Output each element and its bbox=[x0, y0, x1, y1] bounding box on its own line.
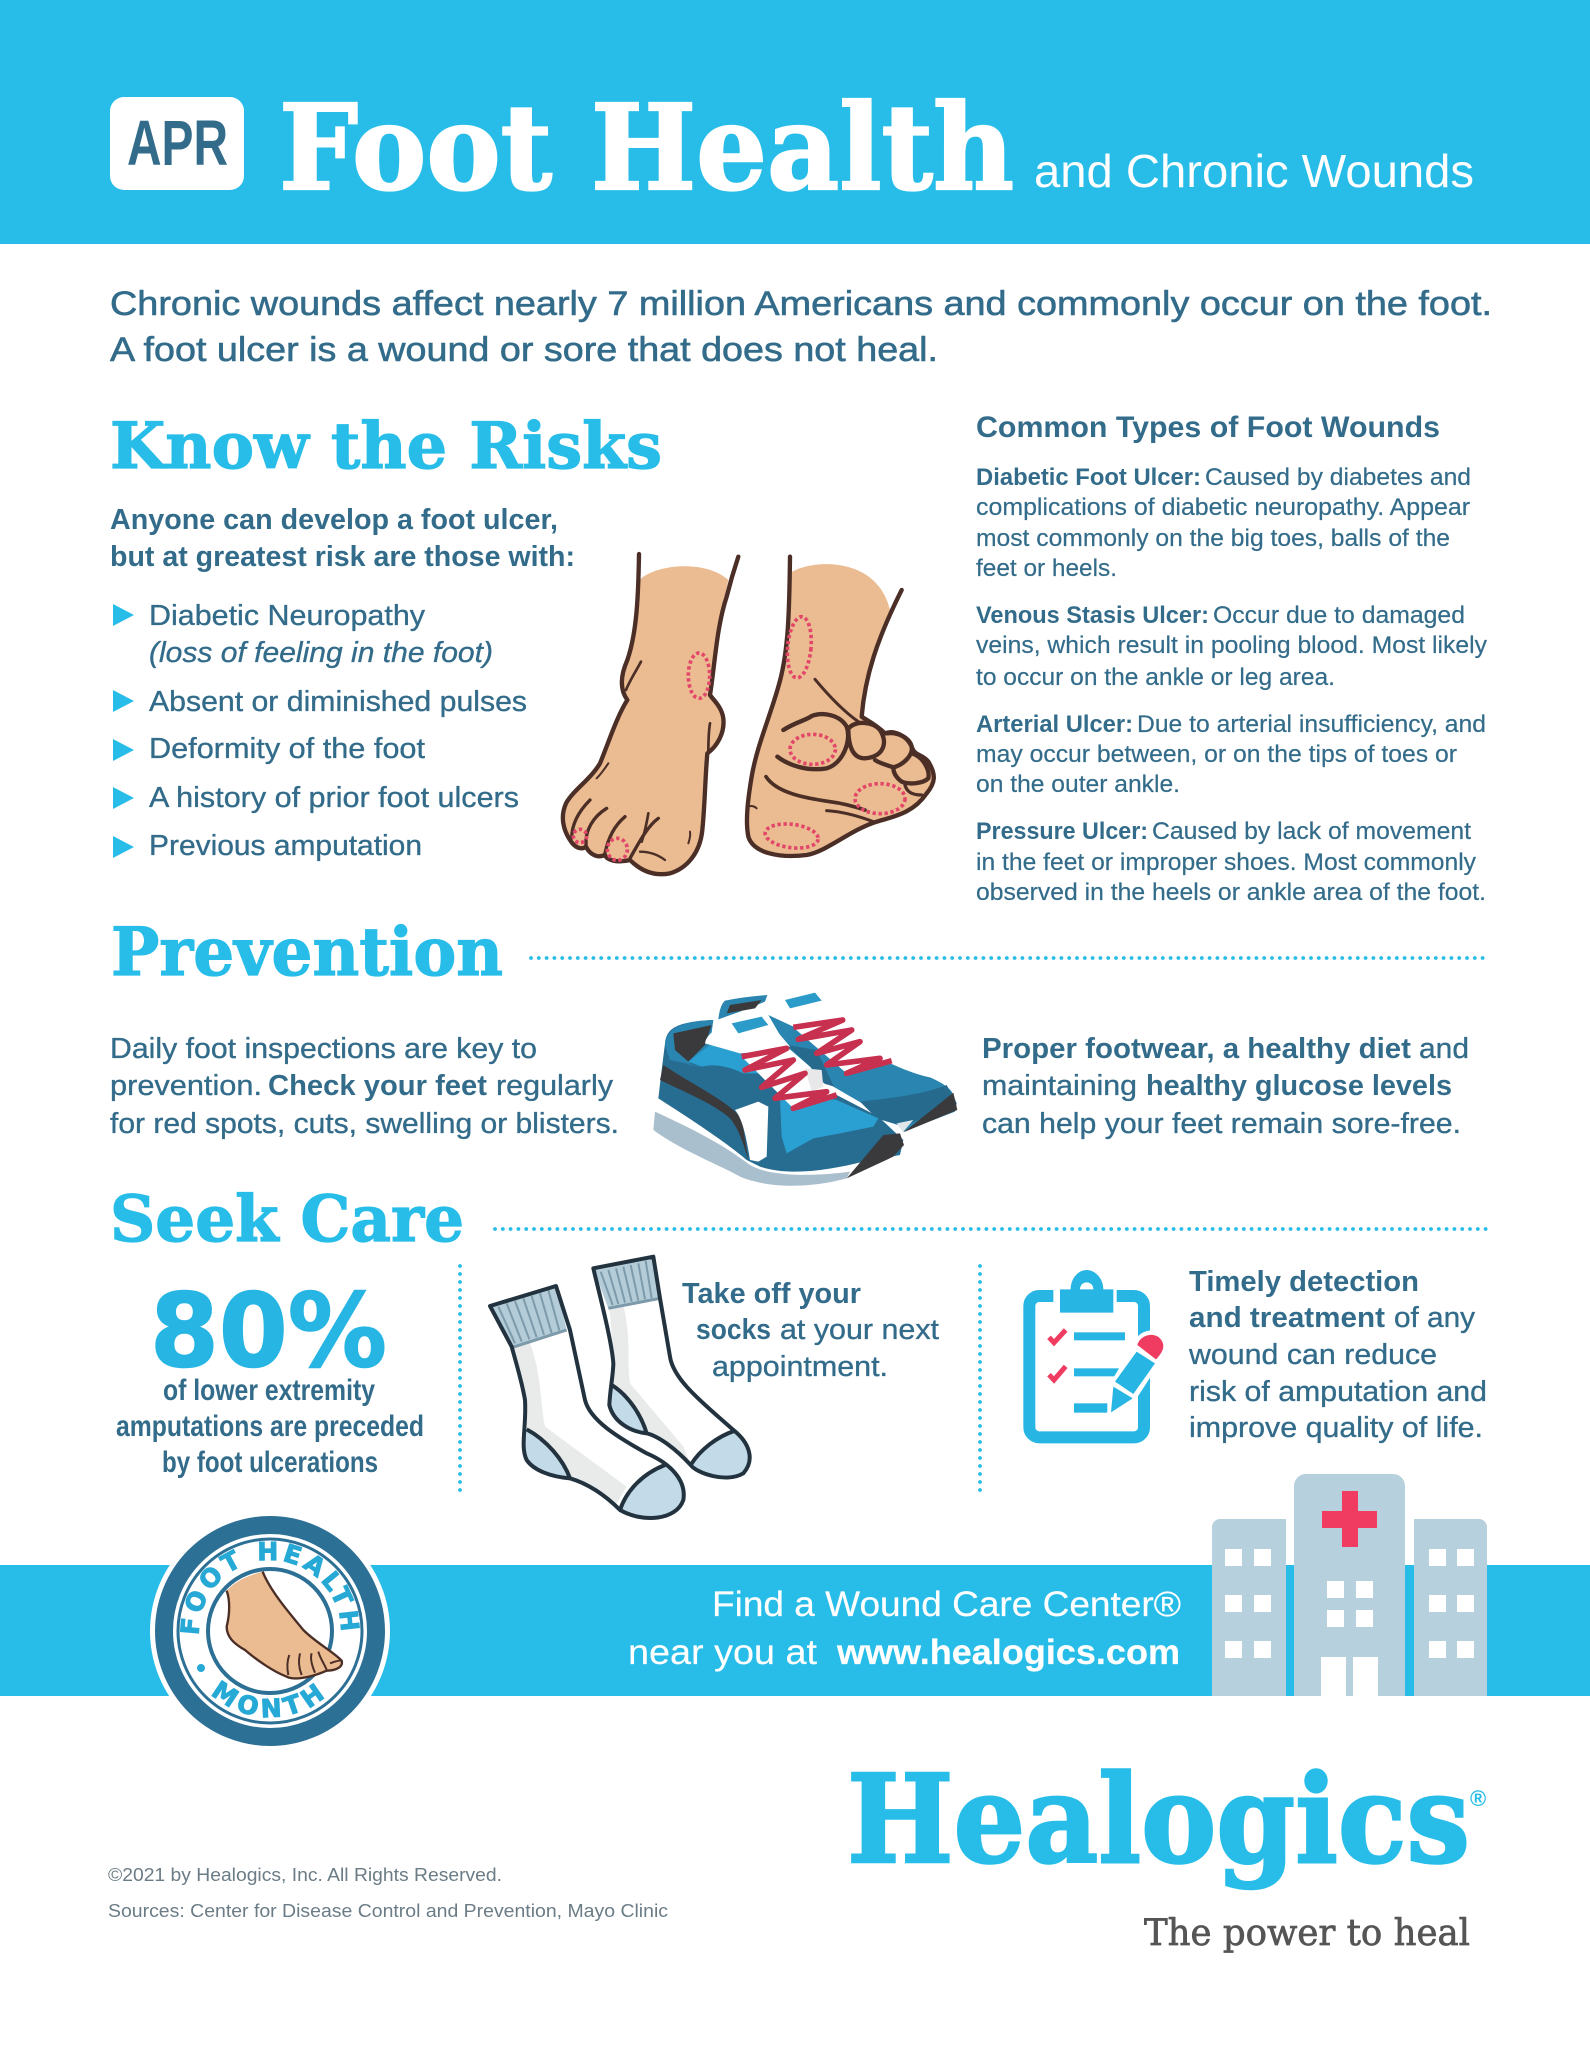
heading: Prevention: Prevention bbox=[111, 913, 503, 991]
prevention text: left bbox=[110, 1033, 619, 1140]
risk lead-in text bbox=[110, 504, 575, 573]
right sock bbox=[593, 1257, 750, 1478]
prevention text: right: and bbox=[1419, 1033, 1469, 1065]
pressure ulcer: Caused by lack of movement bbox=[1152, 818, 1471, 845]
socks text: at your next bbox=[780, 1314, 939, 1346]
ulcer zone markers bbox=[573, 616, 905, 860]
arterial ulcer: may occur between, or on the tips of toes or bbox=[976, 741, 1457, 768]
risk factor list: (loss of feeling in the foot) bbox=[149, 637, 493, 669]
illustration: socks bbox=[490, 1257, 750, 1518]
risk factor list: Diabetic Neuropathy bbox=[149, 600, 426, 632]
prevention text: left: for red spots, cuts, swelling or blisters. bbox=[110, 1108, 619, 1140]
logo: Healogics bbox=[847, 1747, 1486, 1954]
arterial ulcer: Arterial Ulcer: bbox=[976, 711, 1133, 738]
prevention text: right: Proper footwear, a healthy diet bbox=[982, 1033, 1411, 1065]
month badge: APR: APR bbox=[127, 107, 228, 179]
care text: and treatment bbox=[1189, 1302, 1385, 1334]
care text: of any bbox=[1394, 1302, 1476, 1334]
care text bbox=[1188, 1266, 1487, 1444]
find a wound care center text bbox=[628, 1585, 1181, 1672]
pressure ulcer bbox=[976, 818, 1486, 906]
month badge: APR bbox=[110, 97, 244, 190]
venous stasis ulcer: to occur on the ankle or leg area. bbox=[976, 664, 1335, 691]
risk lead-in text: Anyone can develop a foot ulcer, bbox=[110, 504, 558, 536]
statistic: 80%: of lower extremity bbox=[163, 1374, 375, 1407]
risk factor list: Previous amputation bbox=[149, 830, 422, 862]
illustration: running shoes bbox=[653, 993, 957, 1186]
icon: hospital bbox=[1212, 1474, 1487, 1696]
title: Foot Health bbox=[279, 78, 1014, 217]
diabetic foot ulcer: Diabetic Foot Ulcer: bbox=[976, 464, 1201, 491]
socks text bbox=[682, 1278, 939, 1383]
diabetic foot ulcer bbox=[976, 464, 1471, 582]
prevention text: right bbox=[982, 1033, 1469, 1140]
icon: clipboard and pencil bbox=[1029, 1270, 1164, 1437]
statistic: 80% bbox=[116, 1272, 424, 1479]
prevention text: left: Daily foot inspections are key to bbox=[110, 1033, 537, 1065]
prevention text: right: can help your feet remain sore-free. bbox=[982, 1108, 1461, 1140]
arterial ulcer: on the outer ankle. bbox=[976, 771, 1180, 798]
arterial ulcer: Due to arterial insufficiency, and bbox=[1137, 711, 1486, 738]
socks text: socks bbox=[696, 1314, 771, 1346]
panel heading: Common Types of Foot Wounds bbox=[976, 411, 1440, 444]
diabetic foot ulcer: feet or heels. bbox=[976, 555, 1117, 582]
prevention text: right: maintaining bbox=[982, 1070, 1137, 1102]
footer: copyright and sources bbox=[108, 1864, 668, 1921]
prevention text: left: prevention. bbox=[110, 1070, 262, 1102]
logo: Healogics: Healogics bbox=[847, 1747, 1470, 1891]
heading: Seek Care: Seek Care bbox=[110, 1182, 464, 1257]
pressure ulcer: in the feet or improper shoes. Most commonly bbox=[976, 849, 1477, 876]
prevention text: right: healthy glucose levels bbox=[1146, 1070, 1452, 1102]
find a wound care center text: near you at bbox=[628, 1633, 817, 1672]
subtitle: and Chronic Wounds bbox=[1034, 145, 1474, 197]
find a wound care center text: www.healogics.com bbox=[836, 1633, 1180, 1672]
diabetic foot ulcer: most commonly on the big toes, balls of the bbox=[976, 525, 1450, 552]
care text: risk of amputation and bbox=[1189, 1376, 1487, 1408]
risk factor list: Deformity of the foot bbox=[149, 733, 425, 765]
intro text: Chronic wounds affect nearly 7 million Americans and commonly occur on the foot. bbox=[110, 285, 1492, 323]
diabetic foot ulcer: Caused by diabetes and bbox=[1205, 464, 1471, 491]
arterial ulcer bbox=[976, 711, 1486, 798]
tagline: The power to heal bbox=[1144, 1913, 1470, 1954]
venous stasis ulcer: veins, which result in pooling blood. Most likely bbox=[976, 632, 1488, 659]
logo: Healogics: ® bbox=[1470, 1786, 1486, 1811]
venous stasis ulcer: Occur due to damaged bbox=[1213, 602, 1465, 629]
pressure ulcer: observed in the heels or ankle area of the foot. bbox=[976, 879, 1486, 906]
socks text: appointment. bbox=[712, 1351, 888, 1383]
statistic: 80%: by foot ulcerations bbox=[162, 1446, 378, 1479]
find a wound care center text: Find a Wound Care Center® bbox=[712, 1585, 1181, 1624]
prevention text: left: regularly bbox=[496, 1070, 614, 1102]
header banner bbox=[0, 0, 1590, 244]
intro text bbox=[110, 285, 1492, 369]
left foot bbox=[563, 554, 738, 874]
illustration: two feet with ulcer zones bbox=[563, 554, 934, 874]
call-to-action band bbox=[0, 1565, 1590, 1696]
risk factor list: A history of prior foot ulcers bbox=[149, 782, 519, 814]
care text: Timely detection bbox=[1189, 1266, 1419, 1298]
right foot bbox=[747, 557, 934, 856]
venous stasis ulcer bbox=[976, 602, 1488, 691]
prevention text: left: Check your feet bbox=[268, 1070, 487, 1102]
left sock bbox=[490, 1286, 684, 1518]
badge foot illustration bbox=[227, 1572, 342, 1678]
statistic: 80%: 80% bbox=[150, 1272, 387, 1391]
badge: foot health month bbox=[150, 1516, 390, 1746]
badge text: month: MONTH bbox=[211, 1680, 324, 1718]
panel: common types of foot wounds bbox=[976, 411, 1488, 906]
risk lead-in text: but at greatest risk are those with: bbox=[110, 541, 575, 573]
pressure ulcer: Pressure Ulcer: bbox=[976, 818, 1148, 845]
risk factor list bbox=[113, 600, 527, 862]
badge text: foot health: FOOT HEALTH bbox=[180, 1541, 360, 1634]
care text: improve quality of life. bbox=[1189, 1412, 1483, 1444]
back shoe bbox=[718, 993, 957, 1132]
intro text: A foot ulcer is a wound or sore that does not heal. bbox=[110, 331, 938, 369]
statistic: 80%: amputations are preceded bbox=[116, 1410, 424, 1443]
footer: copyright and sources: Sources: Center for Disease Control and Prevention, Mayo Clinic bbox=[108, 1900, 668, 1921]
heading: Know the Risks: Know the Risks bbox=[110, 409, 662, 484]
risk factor list: Absent or diminished pulses bbox=[149, 686, 527, 718]
care text: wound can reduce bbox=[1188, 1339, 1437, 1371]
venous stasis ulcer: Venous Stasis Ulcer: bbox=[976, 602, 1209, 629]
diabetic foot ulcer: complications of diabetic neuropathy. Appear bbox=[976, 494, 1470, 521]
socks text: Take off your bbox=[682, 1278, 861, 1310]
front shoe bbox=[653, 1015, 904, 1186]
footer: copyright and sources: ©2021 by Healogics, Inc. All Rights Reserved. bbox=[108, 1864, 502, 1885]
